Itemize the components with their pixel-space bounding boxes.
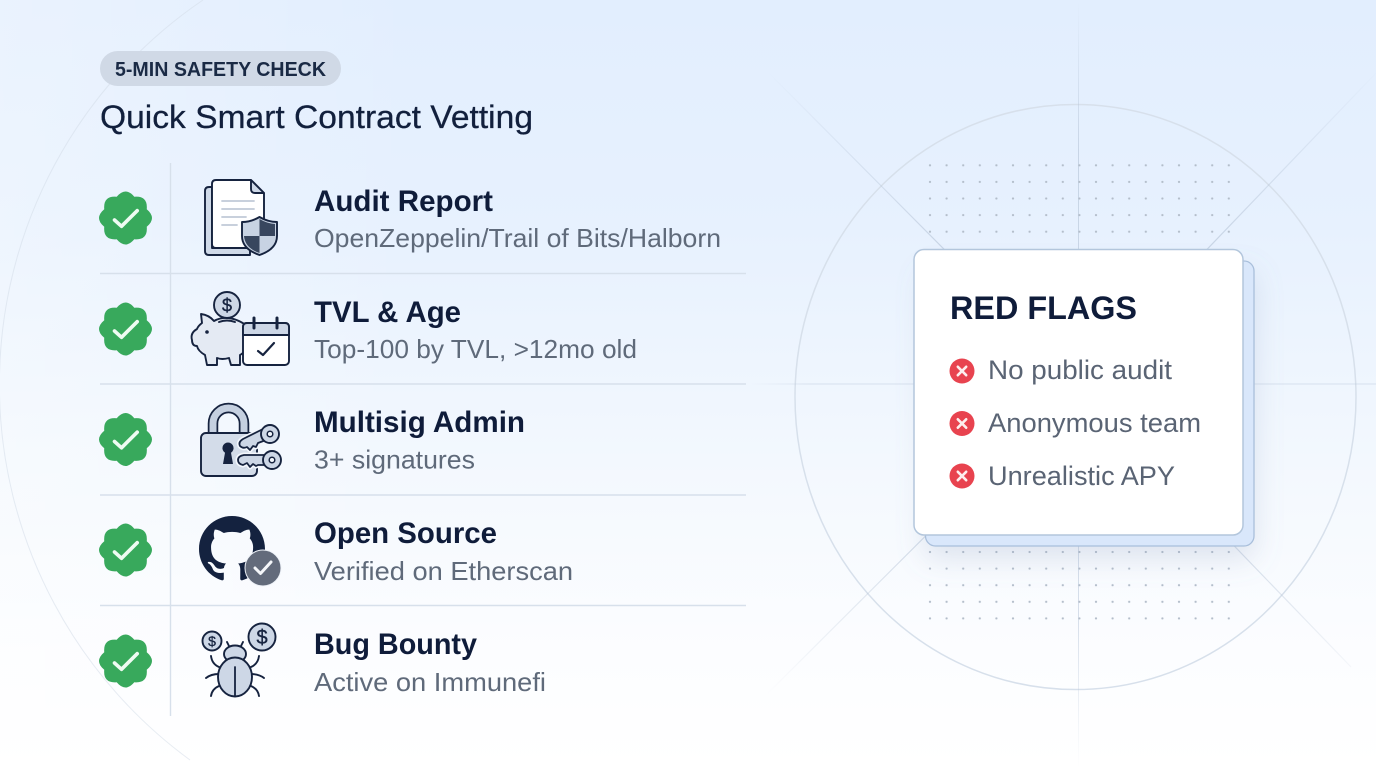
row title: Multisig Admin (314, 406, 525, 439)
row title: Open Source (314, 517, 497, 550)
panel: red flags (914, 250, 1254, 546)
flag: anonymous team: Anonymous team (988, 408, 1201, 438)
row title: Bug Bounty (314, 628, 477, 661)
check badge (99, 634, 152, 688)
icon: piggy bank and calendar: $ (222, 296, 232, 316)
check badge (99, 192, 152, 244)
row detail: 3+ signatures (314, 444, 475, 474)
flag: no public audit: No public audit (988, 355, 1173, 385)
row: open source (99, 516, 573, 586)
check badge (99, 413, 152, 466)
front card (914, 250, 1243, 535)
dot grid: bottom (922, 544, 1237, 627)
dot grid: top (922, 157, 1237, 240)
row detail: Verified on Etherscan (314, 556, 573, 586)
badge label: 5-min safety check: 5-MIN SAFETY CHECK (115, 58, 326, 81)
row: TVL and age (99, 292, 637, 365)
check badge (99, 302, 152, 356)
row: bug bounty (99, 624, 546, 697)
back card (926, 261, 1254, 546)
row title: Audit Report (314, 185, 493, 218)
icon: github with verified check (199, 516, 281, 586)
icon: piggy bank and calendar (192, 292, 289, 365)
check badge (99, 524, 152, 576)
icon: bug with coins: $ (256, 627, 268, 649)
icon: document with shield (205, 180, 277, 255)
row title: TVL & Age (314, 296, 461, 329)
row detail: Active on Immunefi (314, 667, 546, 697)
row detail: OpenZeppelin/Trail of Bits/Halborn (314, 223, 721, 253)
row detail: Top-100 by TVL, >12mo old (314, 334, 637, 364)
title: Quick Smart Contract Vetting (100, 99, 533, 135)
badge label: 5-min safety check (100, 51, 341, 86)
table rules (100, 163, 746, 716)
row: audit report (99, 180, 721, 255)
panel heading: RED FLAGS (950, 290, 1137, 326)
icon: bug with coins: $ (208, 633, 216, 649)
icon: bug with coins (202, 624, 276, 696)
row: multisig admin (99, 406, 525, 476)
flag: unrealistic APY: Unrealistic APY (988, 461, 1175, 491)
icon: padlock with keys (201, 408, 281, 476)
